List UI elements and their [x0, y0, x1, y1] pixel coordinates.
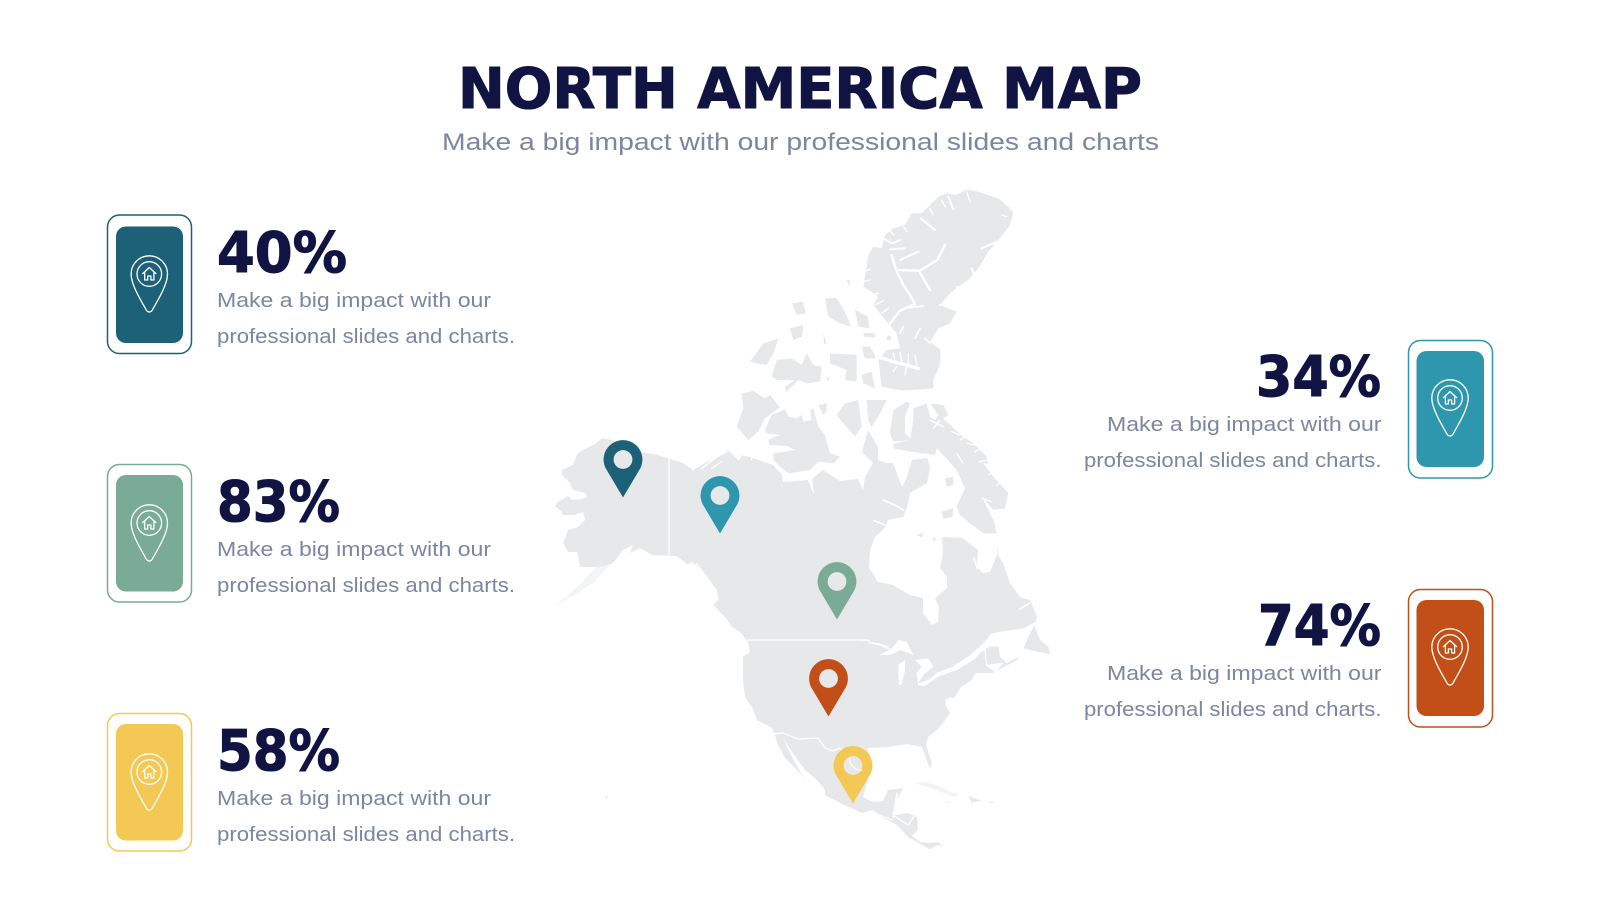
subtitle: Make a big impact with our professional slides and charts: [442, 129, 1159, 156]
description: [1084, 663, 1382, 721]
description: professional slides and charts.: [217, 326, 515, 348]
map: North America: [552, 190, 1050, 849]
Arctic fjords: [860, 192, 1007, 375]
map pin: dark teal: [604, 440, 642, 498]
icon card: [108, 215, 192, 354]
icon card: [1408, 590, 1492, 727]
description: Make a big impact with our: [217, 788, 491, 810]
description: Make a big impact with our: [217, 539, 491, 561]
description: professional slides and charts.: [1084, 699, 1382, 721]
borders: [669, 459, 915, 825]
description: professional slides and charts.: [1084, 450, 1382, 472]
description: Make a big impact with our: [217, 290, 491, 312]
map pin: teal: [701, 476, 739, 534]
panel: 34%: [1084, 340, 1492, 478]
value: 34%: [1256, 345, 1381, 410]
value: 74%: [1258, 594, 1381, 659]
description: professional slides and charts.: [217, 824, 515, 846]
value: 58%: [217, 719, 340, 784]
value: 40%: [217, 221, 347, 286]
description: Make a big impact with our: [1107, 663, 1382, 685]
description: [217, 290, 515, 348]
title: NORTH AMERICA MAP: [458, 57, 1142, 122]
icon card: [108, 714, 192, 851]
Caribbean islands: [915, 782, 994, 803]
panel: 74%: [1084, 590, 1492, 727]
description: professional slides and charts.: [217, 575, 515, 597]
Arctic islands: [737, 298, 1008, 543]
description: [217, 788, 515, 846]
Baffin coast speckle: [927, 420, 1003, 507]
map pin: green: [818, 562, 856, 620]
panel: 40%: [108, 215, 515, 354]
value: 83%: [217, 470, 340, 535]
panel: 58%: [108, 714, 515, 851]
Alaska Peninsula: [552, 565, 610, 608]
map pin: yellow: [834, 746, 872, 804]
panel: 83%: [108, 464, 515, 602]
icon card: [108, 464, 192, 602]
Great Lakes and Gulf of St Lawrence: [860, 500, 1050, 708]
description: Make a big impact with our: [1107, 414, 1382, 436]
map pin: orange: [809, 659, 848, 716]
icon card: [1408, 340, 1492, 478]
description: [217, 539, 515, 597]
Mackenzie delta inlets: [688, 452, 752, 617]
description: [1084, 414, 1382, 472]
